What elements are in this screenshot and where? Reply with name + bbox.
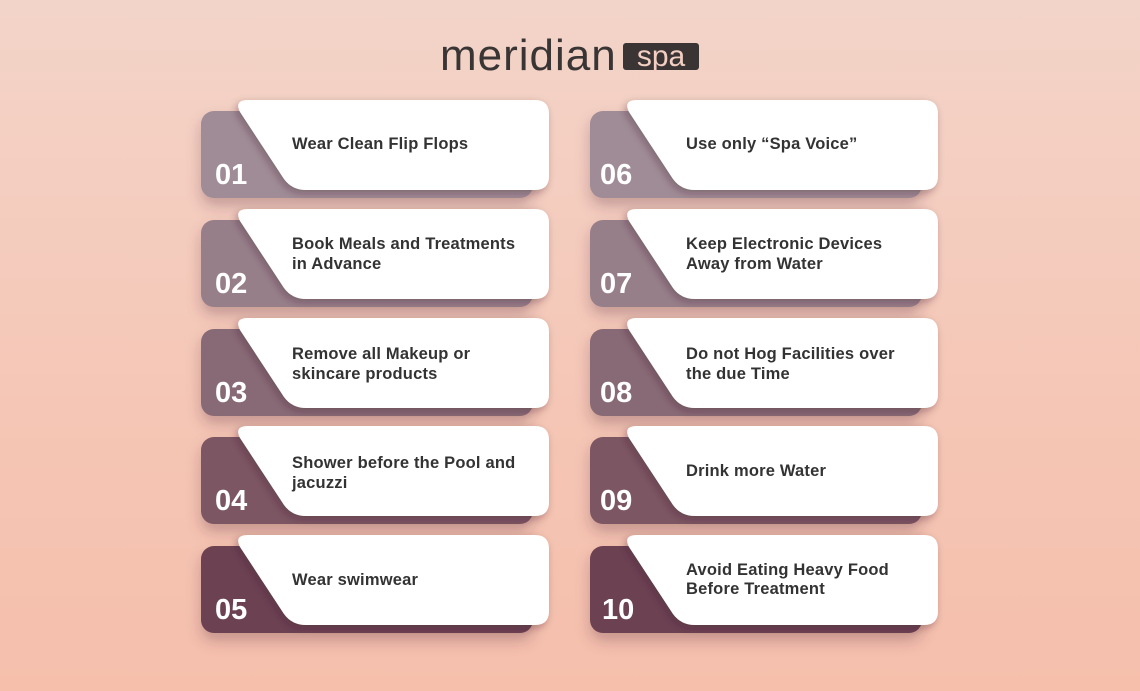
card 09 [590,426,938,524]
card 04: 04 [215,485,247,517]
card 07 [590,209,938,307]
card 10: Avoid Eating Heavy Food [686,561,889,579]
card 04: jacuzzi [291,474,348,492]
card 04 [201,426,549,524]
card 05: 05 [215,594,247,626]
card 01: 01 [215,159,247,191]
card 07: 07 [600,268,632,300]
card 10: Before Treatment [686,580,825,598]
card 02: in Advance [292,255,381,273]
card 01 [201,100,549,198]
card 03: 03 [215,377,247,409]
logo: spa [637,40,685,73]
card 10: 10 [602,594,634,626]
card 07: Away from Water [686,255,823,273]
card 03: skincare products [292,365,438,383]
card 03 [201,318,549,416]
card 01: Wear Clean Flip Flops [292,135,468,153]
card 02 [201,209,549,307]
card 08 [590,318,938,416]
logo [440,31,699,80]
card 03: Remove all Makeup or [292,345,471,363]
card 06: Use only “Spa Voice” [686,135,858,153]
card 05: Wear swimwear [292,571,418,589]
card 08: 08 [600,377,632,409]
card 06: 06 [600,159,632,191]
logo: meridian [440,31,617,80]
card 09: 09 [600,485,632,517]
card 05 [201,535,549,633]
card 08: Do not Hog Facilities over [686,345,895,363]
card 07: Keep Electronic Devices [686,235,882,253]
card 08: the due Time [686,365,790,383]
card 09: Drink more Water [686,462,827,480]
card 04: Shower before the Pool and [292,454,515,472]
card 06 [590,100,938,198]
card 10 [590,535,938,633]
card 02: Book Meals and Treatments [292,235,515,253]
card 02: 02 [215,268,247,300]
